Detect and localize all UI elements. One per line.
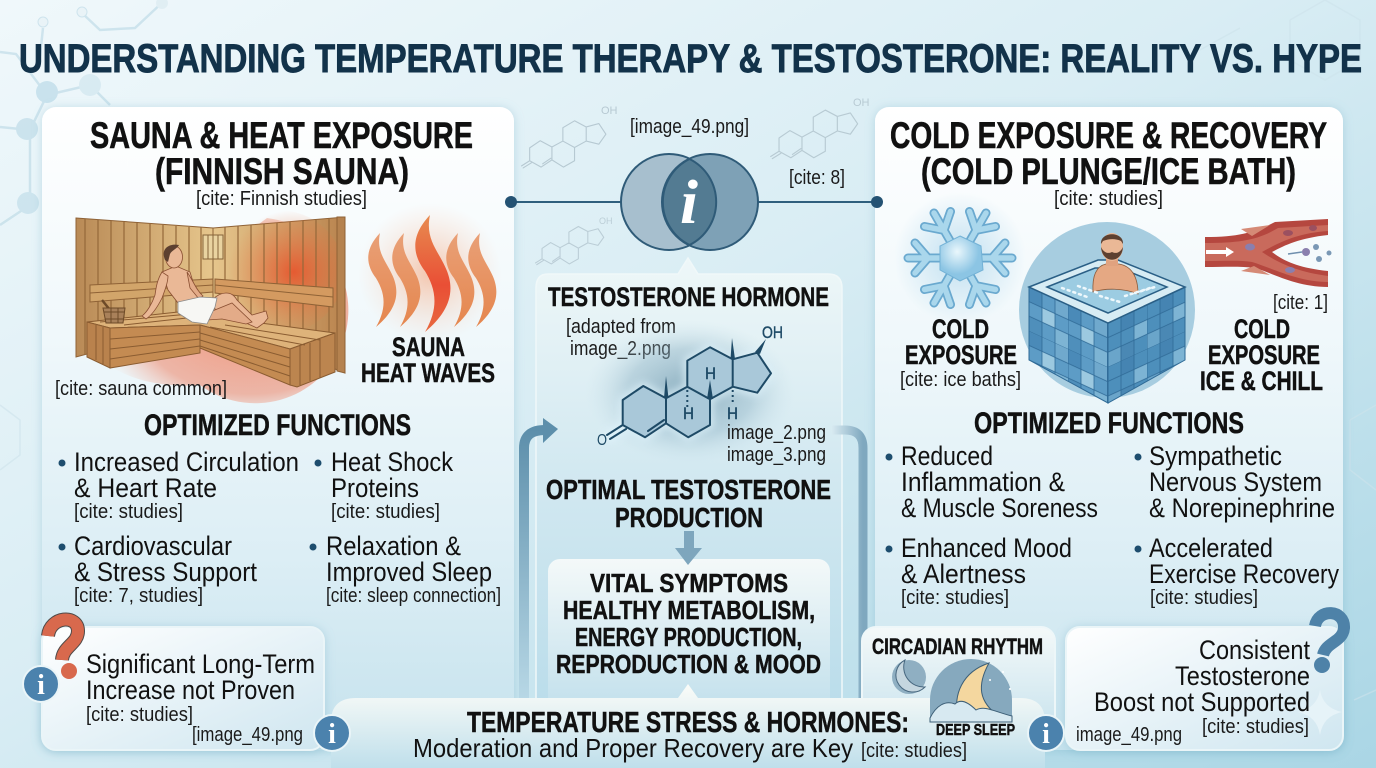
hormone citation: image_2.png — [570, 338, 671, 360]
sauna benefit: heat shock proteins: Proteins — [331, 473, 419, 503]
cold benefit: inflammation: Inflammation & — [901, 467, 1065, 497]
box: vital symptoms — [548, 559, 830, 709]
snowflake label — [900, 314, 1021, 391]
callout: cold testosterone evidence — [1066, 627, 1343, 750]
sauna heat waves label — [361, 332, 495, 388]
sauna benefit: relaxation: Relaxation & — [326, 531, 461, 561]
panel: sauna and heat exposure — [42, 107, 514, 750]
cold benefit: recovery: [cite: studies] — [1150, 587, 1258, 609]
panel: circadian rhythm: CIRCADIAN RHYTHM — [872, 634, 1043, 659]
faint molecule: top left — [522, 105, 618, 168]
cold benefit: sympathetic nervous system: Sympathetic — [1149, 441, 1282, 471]
sauna functions heading: OPTIMIZED FUNCTIONS — [144, 409, 411, 442]
faint molecule: top right: OH — [853, 97, 870, 109]
sauna benefit: circulation: [cite: studies] — [74, 501, 183, 523]
flow arrow: left up to hormone — [524, 418, 558, 700]
bottom statement: Moderation and Proper Recovery are Key — [413, 733, 853, 763]
sauna benefit: circulation: & Heart Rate — [74, 473, 217, 503]
sauna benefit: relaxation — [310, 531, 501, 607]
snowflake label: EXPOSURE — [905, 340, 1017, 370]
callout: cold testosterone evidence: [cite: studies] — [1202, 716, 1309, 738]
cold benefit: mood: Enhanced Mood — [901, 533, 1072, 563]
icon: sauna heat waves — [358, 203, 502, 343]
cold benefit: mood: & Alertness — [901, 559, 1026, 589]
cold citation: [cite: studies] — [1054, 188, 1163, 210]
molecule citations: image_3.png — [727, 444, 826, 466]
snowflake label: [cite: ice baths] — [900, 369, 1021, 391]
faint molecule: middle left: OH — [599, 216, 612, 226]
callout: cold testosterone evidence: image_49.png — [1076, 724, 1182, 746]
sauna benefit: heat shock proteins: [cite: studies] — [331, 501, 440, 523]
arrow: production to symptoms — [675, 531, 702, 565]
icon: info badge left callout — [23, 666, 59, 702]
sauna benefit: relaxation: [cite: sleep connection] — [326, 585, 501, 607]
cold benefit: mood: [cite: studies] — [901, 587, 1009, 609]
vessel label: EXPOSURE — [1208, 340, 1320, 370]
cold benefit: sympathetic nervous system: & Norepinephrine — [1149, 493, 1335, 523]
cold benefit: sympathetic nervous system: Nervous System — [1149, 467, 1322, 497]
molecule: testosterone: H — [683, 404, 694, 423]
faint molecule: top left: OH — [601, 105, 618, 117]
sauna benefit: heat shock proteins — [314, 447, 453, 523]
callout: cold testosterone evidence: Consistent — [1199, 635, 1310, 665]
cold benefit: sympathetic nervous system — [1134, 441, 1335, 523]
cold benefit: recovery: Accelerated — [1149, 533, 1273, 563]
box: vital symptoms: REPRODUCTION & MOOD — [556, 649, 821, 679]
sauna heat waves label: HEAT WAVES — [361, 358, 495, 388]
callout: sauna testosterone evidence — [42, 627, 324, 750]
icon: venn diagram with info mark — [621, 154, 758, 250]
vessel label — [1200, 314, 1323, 396]
production heading: OPTIMAL TESTOSTERONE — [546, 474, 831, 505]
deep sleep label: DEEP SLEEP — [936, 722, 1015, 739]
icon: venn diagram with info mark: i — [680, 169, 698, 237]
sauna benefit: cardiovascular: [cite: 7, studies] — [74, 585, 203, 607]
callout: sauna testosterone evidence: [cite: studies] — [86, 704, 193, 726]
callout: sauna testosterone evidence: Increase not Proven — [86, 675, 295, 705]
illustration: sauna room — [76, 210, 348, 403]
bottom citation: [cite: studies] — [861, 740, 967, 762]
sparkle — [1298, 690, 1342, 735]
icon: info badge bottom left: i — [328, 719, 336, 750]
molecule: testosterone: OH — [762, 323, 783, 342]
sauna heading: (FINNISH SAUNA) — [155, 151, 409, 192]
production heading — [546, 474, 831, 533]
hormone heading: TESTOSTERONE HORMONE — [548, 282, 829, 312]
sauna citation: [cite: Finnish studies] — [196, 188, 367, 210]
illustration: blood vessel — [1205, 219, 1332, 287]
vessel label: ICE & CHILL — [1200, 366, 1323, 396]
cold functions heading: OPTIMIZED FUNCTIONS — [974, 407, 1244, 440]
icon: small crescent moon — [892, 660, 926, 694]
production heading: PRODUCTION — [615, 502, 763, 533]
box: vital symptoms: ENERGY PRODUCTION, — [575, 622, 802, 652]
faint molecule: top right — [771, 97, 870, 159]
icon: snowflake — [894, 192, 1026, 324]
snowflake label: COLD — [932, 314, 989, 344]
sauna benefit: relaxation: Improved Sleep — [326, 557, 492, 587]
hormone citation — [566, 316, 676, 360]
sauna bucket — [102, 300, 125, 323]
venn citation: top: [image_49.png] — [630, 116, 749, 138]
venn connector lines — [505, 196, 883, 208]
sauna heading: SAUNA & HEAT EXPOSURE — [90, 115, 473, 156]
sauna heat waves label: SAUNA — [392, 332, 465, 362]
man relaxing — [142, 245, 268, 328]
illustration: cold plunge tub — [1019, 222, 1195, 403]
sauna heading — [90, 115, 473, 192]
molecule: testosterone: H — [705, 364, 716, 383]
icon: info badge bottom left — [314, 715, 350, 751]
sauna benefit: cardiovascular: Cardiovascular — [74, 531, 232, 561]
molecule: testosterone — [585, 320, 795, 464]
sauna benefit: circulation — [58, 447, 299, 523]
sauna backrest — [90, 279, 333, 307]
callout: sauna testosterone evidence: Significant Long-Term — [86, 649, 315, 679]
faint molecule: middle left — [536, 216, 612, 265]
cold heading — [890, 115, 1327, 192]
vessel label: COLD — [1234, 314, 1290, 344]
sauna benefit: cardiovascular — [58, 531, 257, 607]
icon: blue question mark — [1314, 613, 1344, 673]
cold benefit: mood — [886, 533, 1072, 609]
panel: temperature stress and hormones — [331, 684, 1045, 768]
panel: testosterone hormone — [536, 258, 842, 720]
cold benefit: inflammation — [886, 441, 1098, 523]
panel: cold exposure and recovery — [875, 107, 1343, 750]
callout: sauna testosterone evidence: [image_49.png — [192, 724, 303, 746]
venn citation: right: [cite: 8] — [789, 167, 845, 189]
molecule: testosterone: H — [727, 404, 738, 423]
icon: info badge left callout: i — [37, 670, 45, 701]
cold benefit: recovery — [1134, 533, 1339, 609]
cold benefit: inflammation: Reduced — [901, 441, 993, 471]
box: vital symptoms: HEALTHY METABOLISM, — [563, 595, 815, 625]
hormone citation: [adapted from — [566, 316, 676, 338]
callout: cold testosterone evidence: Testosterone — [1175, 661, 1310, 691]
cold benefit: inflammation: & Muscle Soreness — [901, 493, 1098, 523]
icon: info badge bottom right — [1028, 715, 1064, 751]
sauna illustration citation: [cite: sauna common] — [55, 378, 227, 400]
sauna benefit: heat shock proteins: Heat Shock — [331, 447, 453, 477]
icon: deep sleep moon — [930, 659, 1012, 722]
sauna vent — [203, 235, 223, 280]
bottom heading: TEMPERATURE STRESS & HORMONES: — [467, 707, 909, 739]
molecule citations: image_2.png — [727, 422, 826, 444]
vessel citation: [cite: 1] — [1273, 292, 1328, 314]
flow arrow: right down from hormone — [832, 430, 863, 700]
molecule: testosterone: O — [597, 432, 607, 449]
box: vital symptoms: VITAL SYMPTOMS — [590, 568, 788, 598]
callout: cold testosterone evidence: Boost not Supported — [1094, 687, 1310, 717]
molecule citations — [727, 422, 826, 466]
man in ice bath — [1093, 233, 1138, 294]
icon: info badge bottom right: i — [1042, 719, 1050, 750]
sauna benefit: circulation: Increased Circulation — [74, 447, 299, 477]
panel: circadian rhythm — [862, 627, 1055, 747]
sauna bench — [87, 312, 335, 387]
sauna benefit: cardiovascular: & Stress Support — [74, 557, 257, 587]
cold benefit: recovery: Exercise Recovery — [1149, 559, 1339, 589]
icon: orange question mark — [48, 620, 78, 679]
